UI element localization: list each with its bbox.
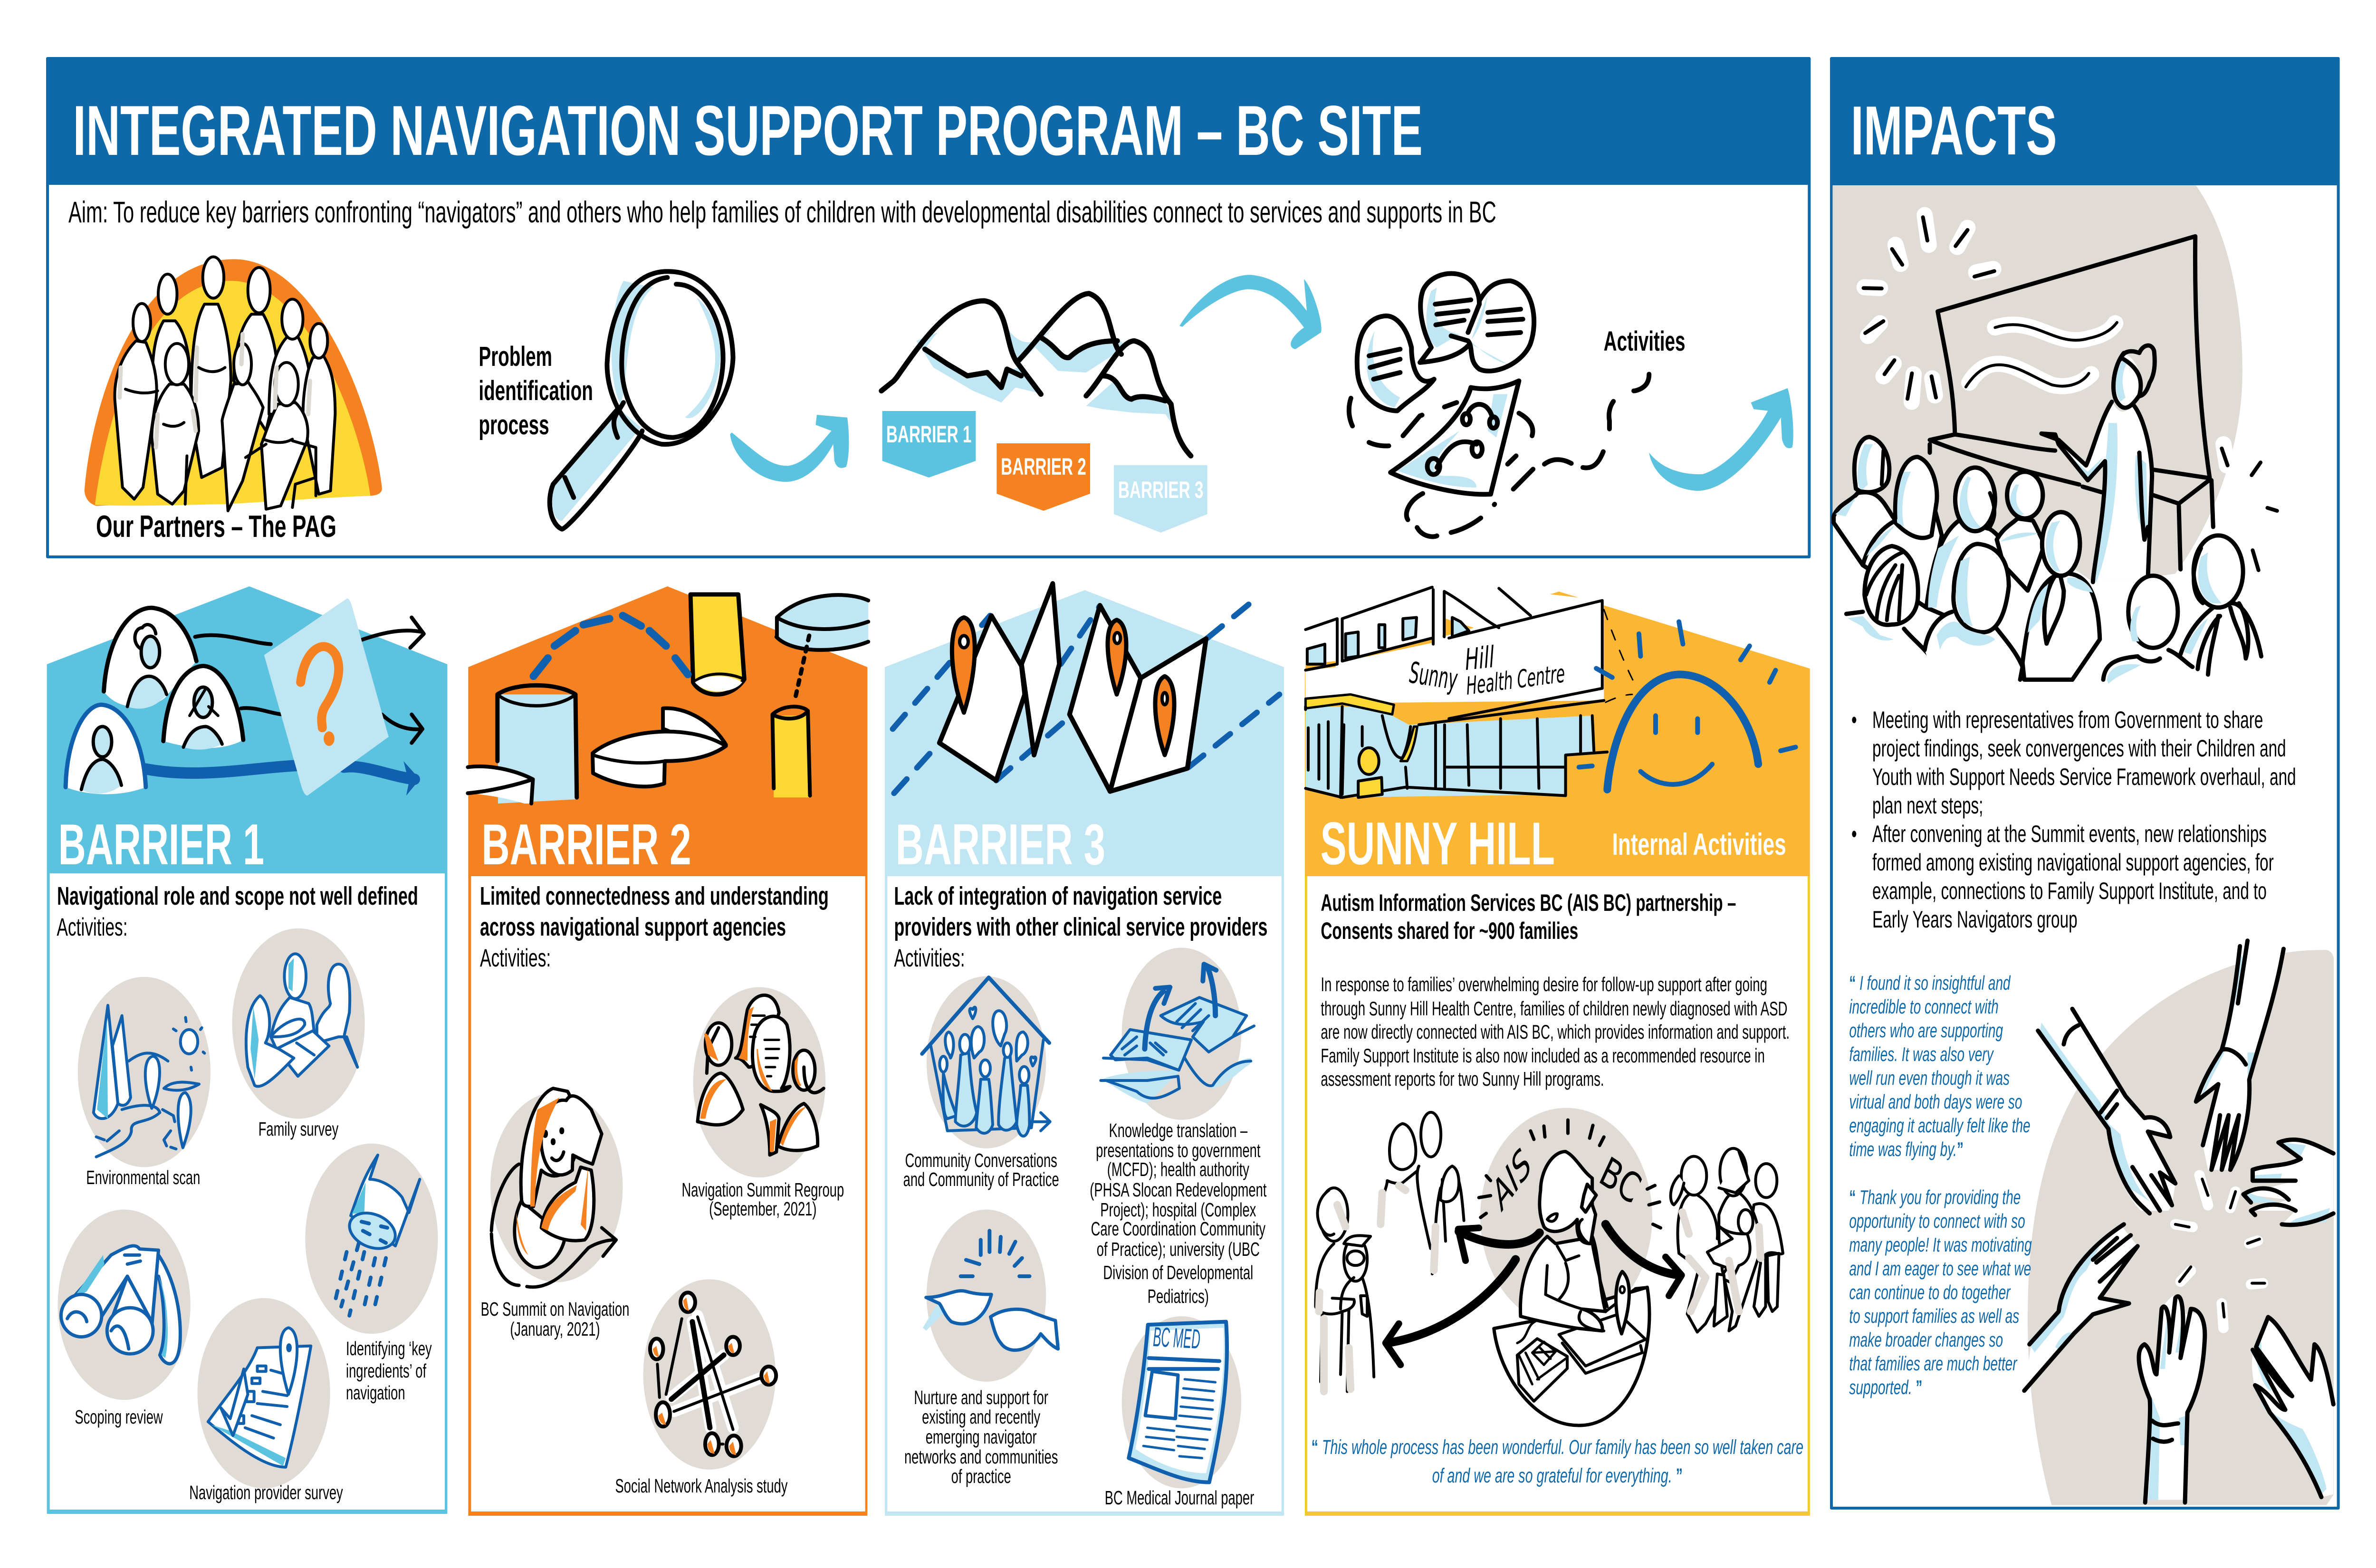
barrier 1 heading: Navigational role and scope not well defined xyxy=(57,881,418,910)
title banner xyxy=(48,58,1809,185)
caption: key ingredients: ingredients’ of xyxy=(346,1360,426,1382)
quote 1: well run even though it was xyxy=(1849,1067,2010,1089)
icon: mountains xyxy=(881,294,1191,456)
caption: key ingredients xyxy=(346,1338,432,1404)
illustration: presenter and audience xyxy=(1832,185,2277,684)
quote 1: incredible to connect with xyxy=(1849,995,1999,1018)
icon: social network xyxy=(643,1279,776,1470)
caption: key ingredients: navigation xyxy=(346,1382,405,1404)
tag: barrier 3 xyxy=(1114,465,1207,533)
aim statement: Aim: To reduce key barriers confronting “navigators” and others who help families of children with developmental disabilities connect to services and supports in BC xyxy=(68,196,1496,229)
caption: regroup xyxy=(681,1179,844,1220)
tag: barrier 1: BARRIER 1 xyxy=(886,421,971,448)
impacts bullet list: Youth with Support Needs Service Framework overhaul, and xyxy=(1872,764,2296,791)
caption: community conversations xyxy=(903,1150,1059,1190)
impacts bullet list: After convening at the Summit events, new relationships xyxy=(1872,821,2267,848)
family quote: of and we are so grateful for everything. ” xyxy=(1432,1464,1683,1487)
quote 1: “ I found it so insightful and xyxy=(1849,972,2011,994)
family quote: “ This whole process has been wonderful. Our family has been so well taken care xyxy=(1312,1435,1803,1458)
impacts bullet list: plan next steps; xyxy=(1872,793,1983,819)
caption: knowledge translation: Division of Developmental xyxy=(1103,1262,1253,1283)
barrier 1 title: BARRIER 1 xyxy=(58,812,264,877)
caption: community conversations: and Community of Practice xyxy=(903,1169,1059,1190)
caption: knowledge translation: Care Coordination Community xyxy=(1091,1218,1266,1240)
panel: barrier 2 xyxy=(468,586,868,1516)
sunny hill heading: Consents shared for ~900 families xyxy=(1321,918,1578,945)
caption: bc summit xyxy=(481,1299,629,1340)
impacts bullet list: formed among existing navigational support agencies, for xyxy=(1872,850,2274,876)
impacts bullet list: project findings, seek convergences with their Children and xyxy=(1872,736,2286,762)
caption: community conversations: Community Conversations xyxy=(905,1150,1057,1171)
problem identification label: identification xyxy=(479,375,593,406)
barrier 3 title: BARRIER 3 xyxy=(896,812,1105,877)
tag: barrier 2 xyxy=(996,443,1090,511)
sunny hill description xyxy=(1321,974,1790,1090)
internal activities label: Internal Activities xyxy=(1612,827,1786,861)
caption: regroup: Navigation Summit Regroup xyxy=(681,1179,844,1201)
quote 2: supported. ” xyxy=(1849,1376,1922,1398)
barrier 1 activities label: Activities: xyxy=(57,913,128,941)
illustration: disconnected cylinders xyxy=(468,594,868,803)
icon: environmental scan xyxy=(78,977,211,1167)
impacts bullet list: • xyxy=(1851,821,1857,848)
barrier 2 heading: across navigational support agencies xyxy=(480,912,786,941)
caption: family survey: Family survey xyxy=(259,1119,339,1140)
quote 1: time was flying by.” xyxy=(1849,1138,1964,1160)
icon: magnifying glass xyxy=(550,271,733,529)
caption: nurture: Nurture and support for xyxy=(914,1387,1048,1408)
illustration: sunny hill building and smiling sun xyxy=(1305,587,1796,797)
barrier 3 heading: providers with other clinical service providers xyxy=(894,912,1267,941)
title banner: INTEGRATED NAVIGATION SUPPORT PROGRAM – BC SITE xyxy=(73,91,1423,170)
barrier 3 header shape xyxy=(885,590,1284,1516)
caption: knowledge translation: (PHSA Slocan Redevelopment xyxy=(1090,1179,1267,1201)
barrier 2 heading xyxy=(480,881,829,941)
icon: partners group under rainbow xyxy=(85,257,382,511)
caption: knowledge translation: (MCFD); health authority xyxy=(1107,1159,1249,1180)
activities label: Activities xyxy=(1604,326,1686,357)
impacts bullet list xyxy=(1851,707,2296,933)
icon: community house xyxy=(922,976,1050,1148)
quote 2: that families are much better xyxy=(1849,1352,2018,1375)
caption: knowledge translation: presentations to government xyxy=(1096,1140,1261,1161)
icon: person on summit call xyxy=(490,1089,623,1287)
icon: journal xyxy=(1122,1316,1241,1488)
sunny hill description: assessment reports for two Sunny Hill programs. xyxy=(1321,1069,1604,1090)
icon: speech bubbles and map xyxy=(1349,274,1649,536)
tag: barrier 1 xyxy=(882,411,976,478)
icon: watering head xyxy=(305,1144,438,1334)
building sign xyxy=(1408,640,1566,701)
journal masthead: BC MED xyxy=(1153,1321,1200,1355)
quote 1: virtual and both days were so xyxy=(1849,1090,2022,1113)
quote 2: can continue to do together xyxy=(1849,1281,2011,1303)
problem identification label xyxy=(479,341,593,440)
barrier 2 title: BARRIER 2 xyxy=(481,812,691,877)
impacts bullet list: Meeting with representatives from Government to share xyxy=(1872,707,2263,734)
panel: barrier 3 xyxy=(885,583,1284,1516)
caption: journal: BC Medical Journal paper xyxy=(1105,1487,1254,1509)
panel: barrier 1 xyxy=(47,586,447,1514)
quote 1: engaging it actually felt like the xyxy=(1849,1114,2031,1137)
sunny hill description: are now directly connected with AIS BC, which provides information and support. xyxy=(1321,1022,1790,1043)
family quote xyxy=(1312,1435,1803,1487)
barrier 1 header shape xyxy=(47,586,447,1514)
arrow to barriers row xyxy=(1649,388,1793,491)
caption: knowledge translation: of Practice); university (UBC xyxy=(1097,1239,1260,1260)
barrier 3 heading xyxy=(894,881,1267,941)
building sign: Hill xyxy=(1464,640,1495,677)
building sign: Health Centre xyxy=(1466,660,1566,701)
caption: bc summit: (January, 2021) xyxy=(510,1319,600,1340)
sunny hill header shape xyxy=(1305,592,1810,1516)
icon: family survey xyxy=(232,928,365,1119)
barrier 3 heading: Lack of integration of navigation service xyxy=(894,881,1222,910)
caption: knowledge translation: Knowledge translation – xyxy=(1109,1120,1248,1141)
sunny hill title: SUNNY HILL xyxy=(1321,810,1555,877)
barrier 3 activities label: Activities: xyxy=(894,944,965,972)
problem identification label: Problem xyxy=(479,341,552,372)
caption: scoping review: Scoping review xyxy=(75,1406,163,1428)
barrier 2 header shape xyxy=(468,586,867,1516)
caption: key ingredients: Identifying ‘key xyxy=(346,1338,432,1359)
illustration: folded map with pins xyxy=(893,583,1279,793)
quote 2: “ Thank you for providing the xyxy=(1849,1186,2021,1208)
caption: knowledge translation xyxy=(1090,1120,1267,1307)
illustration: people in domes with question card xyxy=(66,599,424,795)
caption: nurture: existing and recently xyxy=(922,1406,1041,1428)
caption: environmental scan: Environmental scan xyxy=(86,1167,200,1188)
quote 2: many people! It was motivating xyxy=(1849,1233,2032,1256)
quote 2: and I am eager to see what we xyxy=(1849,1257,2031,1280)
caption: nurture xyxy=(904,1387,1058,1487)
illustration: reaching hands xyxy=(2024,941,2334,1505)
caption: regroup: (September, 2021) xyxy=(709,1198,816,1220)
panel: program overview xyxy=(48,58,1809,557)
sunny hill description: through Sunny Hill Health Centre, families of children newly diagnosed with ASD xyxy=(1321,998,1788,1020)
illustration: AIS BC phone worker connecting families xyxy=(1315,1108,1783,1425)
quote 2: to support families as well as xyxy=(1849,1305,2019,1327)
sunny hill description: Family Support Institute is also now included as a recommended resource in xyxy=(1321,1045,1765,1067)
problem identification label: process xyxy=(479,410,549,440)
sunny hill heading: Autism Information Services BC (AIS BC) partnership – xyxy=(1321,890,1736,917)
icon: summit regroup xyxy=(693,987,825,1177)
building sign: Sunny xyxy=(1408,656,1459,697)
icon: binoculars xyxy=(58,1210,191,1400)
caption: nurture: emerging navigator xyxy=(926,1426,1037,1448)
impacts bullet list: • xyxy=(1851,707,1857,734)
panel: sunny hill xyxy=(1305,587,1810,1516)
tag: barrier 2: BARRIER 2 xyxy=(1001,454,1086,480)
quote 1: families. It was also very xyxy=(1849,1043,1994,1065)
impacts banner: IMPACTS xyxy=(1851,92,2057,170)
icon: provider survey xyxy=(198,1298,330,1488)
handwritten BC: BC xyxy=(1596,1147,1645,1215)
caption: nurture: of practice xyxy=(951,1466,1011,1487)
impacts banner xyxy=(1831,58,2338,185)
quote 2: opportunity to connect with so xyxy=(1849,1210,2025,1232)
barrier 2 heading: Limited connectedness and understanding xyxy=(480,881,829,910)
quote 2: make broader changes so xyxy=(1849,1329,2003,1351)
handwritten AIS: AIS xyxy=(1485,1140,1538,1220)
caption: social network: Social Network Analysis study xyxy=(615,1475,788,1497)
partners label: Our Partners – The PAG xyxy=(96,509,336,544)
quote 2 xyxy=(1849,1186,2032,1398)
quote 1 xyxy=(1849,972,2031,1160)
caption: knowledge translation: Pediatrics) xyxy=(1148,1286,1209,1307)
sunny hill description: In response to families’ overwhelming desire for follow-up support after going xyxy=(1321,974,1767,995)
quote 1: others who are supporting xyxy=(1849,1019,2003,1042)
icon: knowledge translation xyxy=(1101,948,1254,1120)
icon: nurturing hands xyxy=(923,1210,1061,1382)
barrier 2 activities label: Activities: xyxy=(480,944,551,972)
sunny hill heading xyxy=(1321,890,1736,945)
caption: provider survey: Navigation provider survey xyxy=(189,1482,343,1503)
caption: nurture: networks and communities xyxy=(904,1446,1058,1468)
caption: bc summit: BC Summit on Navigation xyxy=(481,1299,629,1320)
arrow to activities xyxy=(1179,275,1322,349)
tag: barrier 3: BARRIER 3 xyxy=(1118,477,1203,504)
impacts bullet list: example, connections to Family Support Institute, and to xyxy=(1872,878,2267,905)
panel: impacts xyxy=(1831,58,2338,1508)
caption: knowledge translation: Project); hospital (Complex xyxy=(1100,1199,1256,1221)
impacts bullet list: Early Years Navigators group xyxy=(1872,907,2078,933)
arrow to barriers xyxy=(730,415,849,482)
